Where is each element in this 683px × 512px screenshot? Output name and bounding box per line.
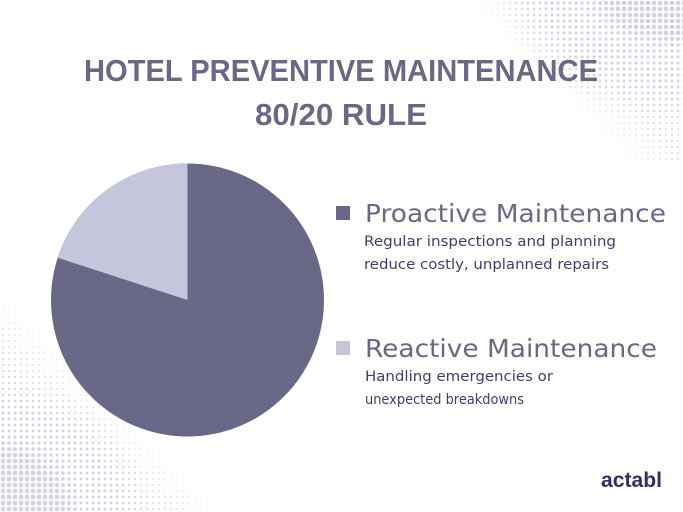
title xyxy=(84,54,598,132)
legend: proactive maintenance xyxy=(336,199,666,273)
legend: proactive maintenance: Proactive Maintenance xyxy=(365,199,666,228)
legend: reactive maintenance: unexpected breakdowns xyxy=(365,392,524,408)
pie chart xyxy=(51,164,324,436)
title: HOTEL PREVENTIVE MAINTENANCE xyxy=(84,54,598,88)
decorative dots: bottom left xyxy=(0,304,208,512)
legend: proactive maintenance: Regular inspections and planning xyxy=(364,234,616,250)
legend: reactive maintenance: Handling emergencies or xyxy=(365,369,553,385)
decorative dots: top right xyxy=(485,0,683,160)
legend: proactive maintenance: reduce costly, unplanned repairs xyxy=(364,257,609,273)
legend: reactive maintenance: Reactive Maintenance xyxy=(365,334,657,363)
legend: reactive maintenance xyxy=(336,334,657,408)
title: 80/20 RULE xyxy=(255,98,427,132)
logo: actabl: actabl xyxy=(601,469,662,492)
